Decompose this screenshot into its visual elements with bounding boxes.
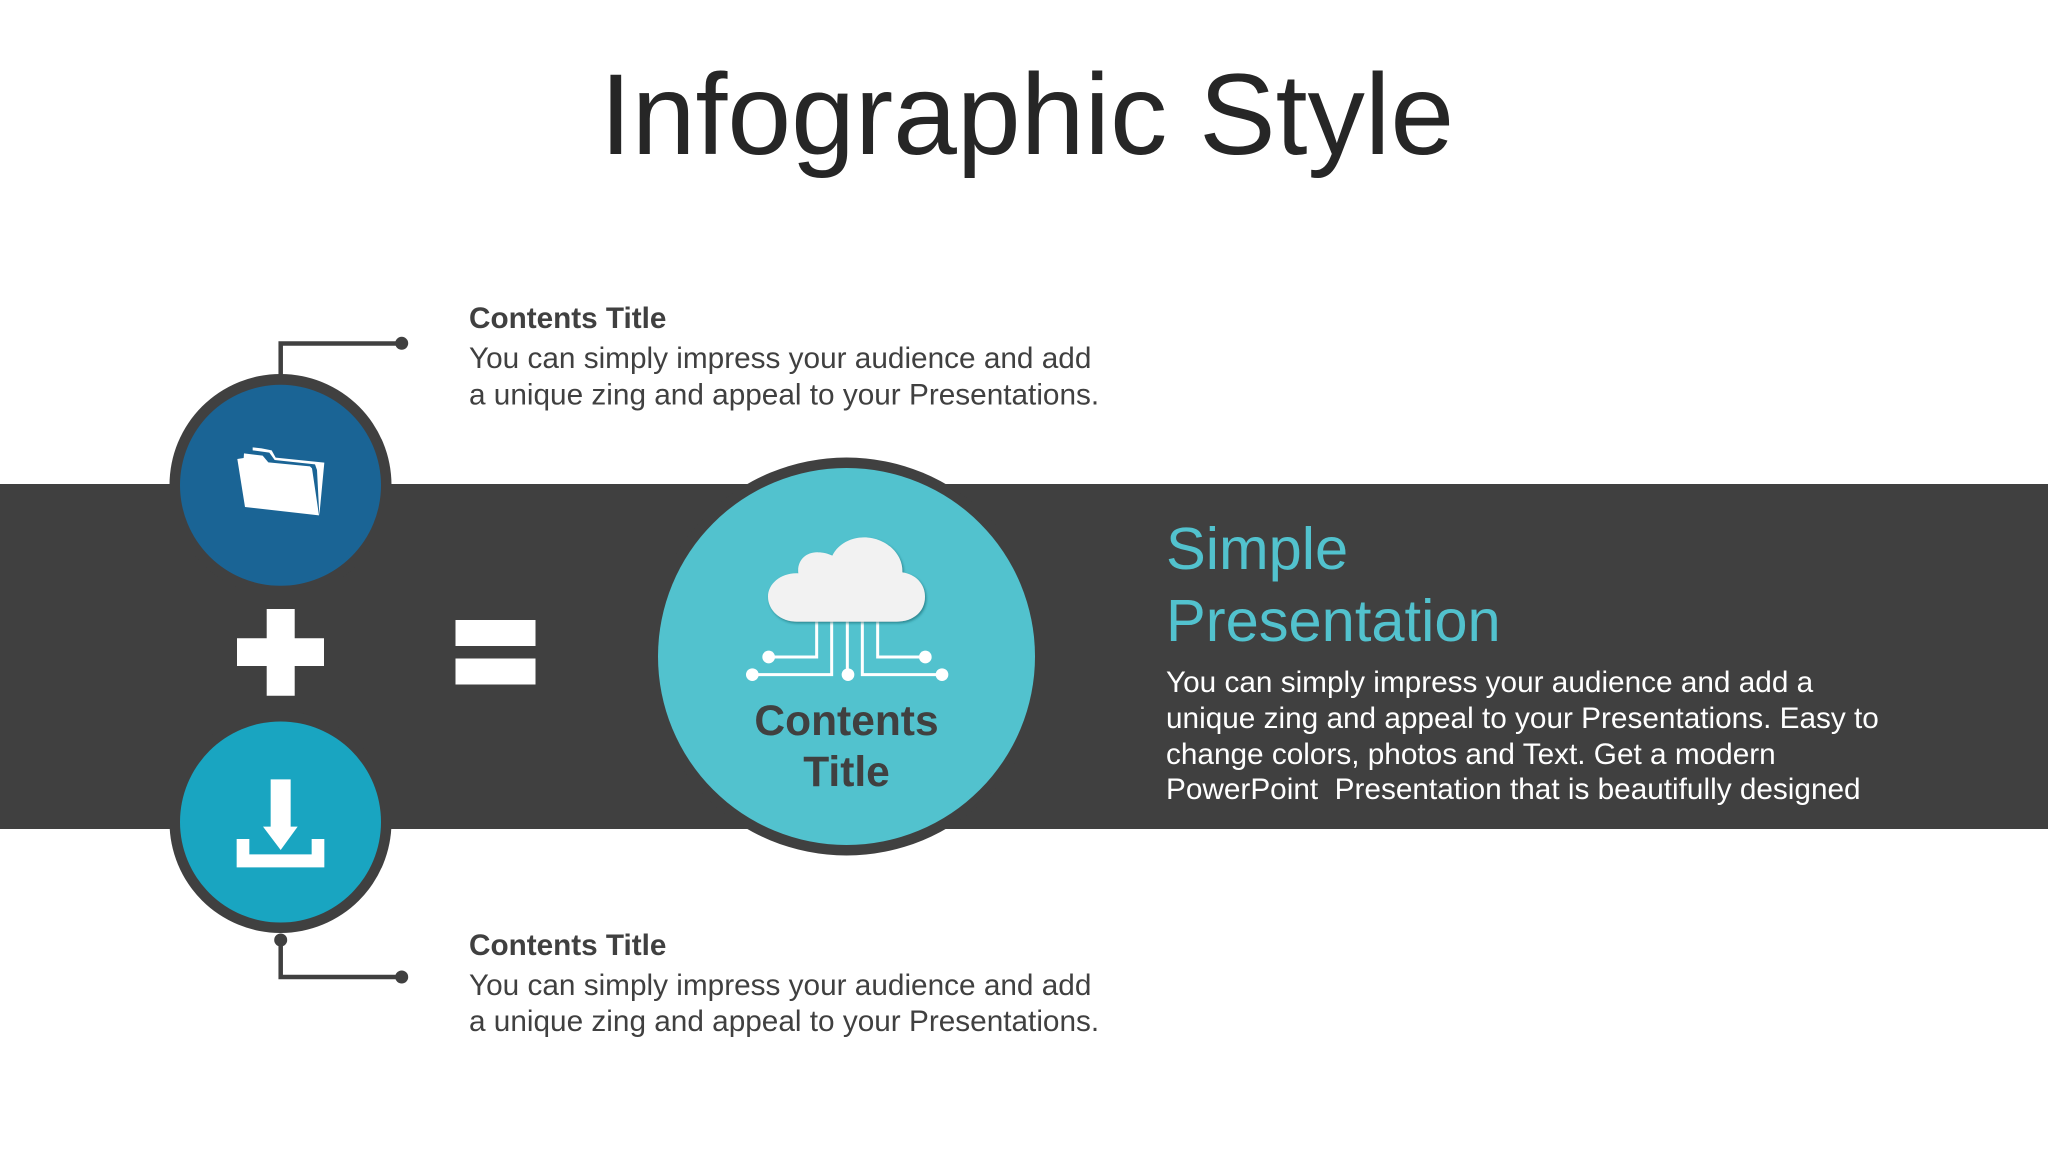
circle: folder: [170, 374, 392, 596]
heading: simple presentation: Presentation: [1166, 587, 1501, 654]
text block: bottom: a unique zing and appeal to your Presentations.: [469, 1005, 1099, 1038]
central label: Contents: [754, 698, 939, 745]
text block: right: change colors, photos and Text. Get a modern: [1166, 738, 1776, 771]
title: Infographic Style: [600, 51, 1454, 179]
text block: top: Contents Title: [469, 302, 666, 335]
text block: right: You can simply impress your audience and add a: [1166, 666, 1814, 699]
connector: top: [281, 337, 408, 376]
connector: bottom: [274, 934, 408, 984]
icon: cloud network: [746, 537, 948, 681]
text block: right: [1166, 666, 1879, 806]
text block: top: You can simply impress your audience and add: [469, 342, 1091, 375]
central label: [754, 698, 939, 796]
heading: simple presentation: [1166, 515, 1501, 654]
icon: download: [237, 779, 324, 867]
circle: download: [170, 711, 392, 933]
text block: bottom: You can simply impress your audience and add: [469, 969, 1091, 1002]
central circle: [648, 458, 1046, 856]
text block: right: unique zing and appeal to your Presentations. Easy to: [1166, 702, 1879, 735]
plus sign: [237, 609, 324, 696]
central label: Title: [803, 749, 890, 796]
text block: top: [469, 302, 1099, 412]
equals sign: [456, 620, 536, 684]
icon: folder: [237, 447, 324, 515]
dark horizontal band: [0, 484, 2048, 829]
text block: right: PowerPoint Presentation that is beautifully designed: [1166, 773, 1861, 806]
text block: bottom: Contents Title: [469, 929, 666, 962]
text block: top: a unique zing and appeal to your Presentations.: [469, 378, 1099, 412]
heading: simple presentation: Simple: [1166, 515, 1348, 582]
text block: bottom: [469, 929, 1099, 1038]
